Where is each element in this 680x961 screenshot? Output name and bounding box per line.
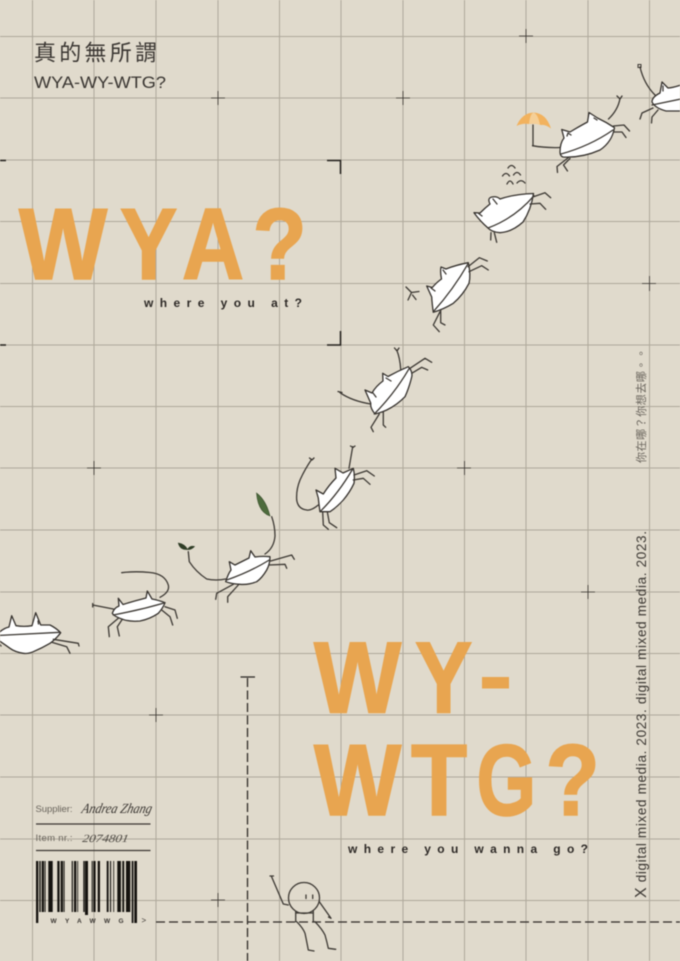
heading: WTG?: G — [476, 725, 536, 838]
icon: umbrella — [516, 112, 551, 146]
crop marks — [0, 160, 340, 345]
chinese title: 真的無所謂 — [34, 36, 157, 68]
creature 4: with spark — [406, 258, 488, 332]
creature 6 — [297, 446, 374, 529]
barcode — [36, 861, 146, 925]
heading: WYA?: W — [19, 188, 107, 301]
barcode caption: G — [118, 918, 124, 925]
creature 5 — [338, 348, 432, 432]
vertical medium text: X digital mixed media. 2023. digital mixed media. 2023. — [633, 531, 650, 898]
registration plus marks — [87, 29, 656, 907]
title block — [34, 36, 166, 92]
supplier label: Supplier: — [36, 804, 72, 815]
icon: leaf — [256, 493, 270, 516]
stick figure — [270, 876, 336, 951]
icon: hail marks — [502, 166, 525, 184]
barcode caption: > — [142, 916, 146, 925]
barcode caption: W — [90, 918, 96, 925]
figure eyes — [306, 895, 313, 898]
creature 2: with umbrella — [516, 96, 630, 172]
heading: WTG? — [314, 723, 600, 838]
creature 7: with leaf and sprout — [178, 493, 294, 602]
vertical chinese text: 你在哪？你想去哪。。 — [633, 348, 649, 463]
heading: WYA?: ? — [252, 189, 307, 301]
heading: WY-: Y — [415, 621, 472, 734]
barcode caption: A — [77, 918, 82, 925]
creature 8 — [93, 572, 177, 637]
creature 1: top right — [638, 64, 680, 123]
caption: where you wanna go?: where you wanna go? — [347, 842, 588, 856]
handwritten item number: 2074801 — [81, 833, 130, 845]
icon: spark — [406, 287, 419, 300]
creature 9: bottom left, cropped — [0, 613, 79, 653]
heading: WTG?: T — [411, 725, 467, 837]
heading: WYA?: Y — [120, 187, 177, 301]
handwritten signature: Andrea Zhang — [79, 801, 154, 817]
figure head — [288, 882, 320, 914]
figure arms and legs — [270, 876, 336, 951]
icon: sprout — [178, 543, 194, 550]
dashed guide lines — [156, 677, 680, 961]
heading: WY- — [314, 621, 472, 734]
caption: where you at?: where you at? — [143, 296, 302, 310]
barcode caption: Y — [65, 918, 70, 925]
creature 3: with hail marks — [474, 166, 551, 242]
heading: WYA?: A — [182, 187, 244, 301]
barcode caption: W — [50, 918, 58, 925]
english subtitle: WYA-WY-WTG? — [34, 73, 166, 92]
heading: WYA? — [19, 187, 307, 301]
item label: Item nr.: — [36, 833, 72, 844]
heading: WY-: W — [314, 621, 402, 734]
supplier block — [36, 801, 154, 850]
heading hyphen — [482, 677, 509, 688]
barcode caption: W — [104, 918, 111, 925]
heading: WTG?: W — [314, 723, 402, 837]
heading: WTG?: ? — [546, 725, 600, 837]
